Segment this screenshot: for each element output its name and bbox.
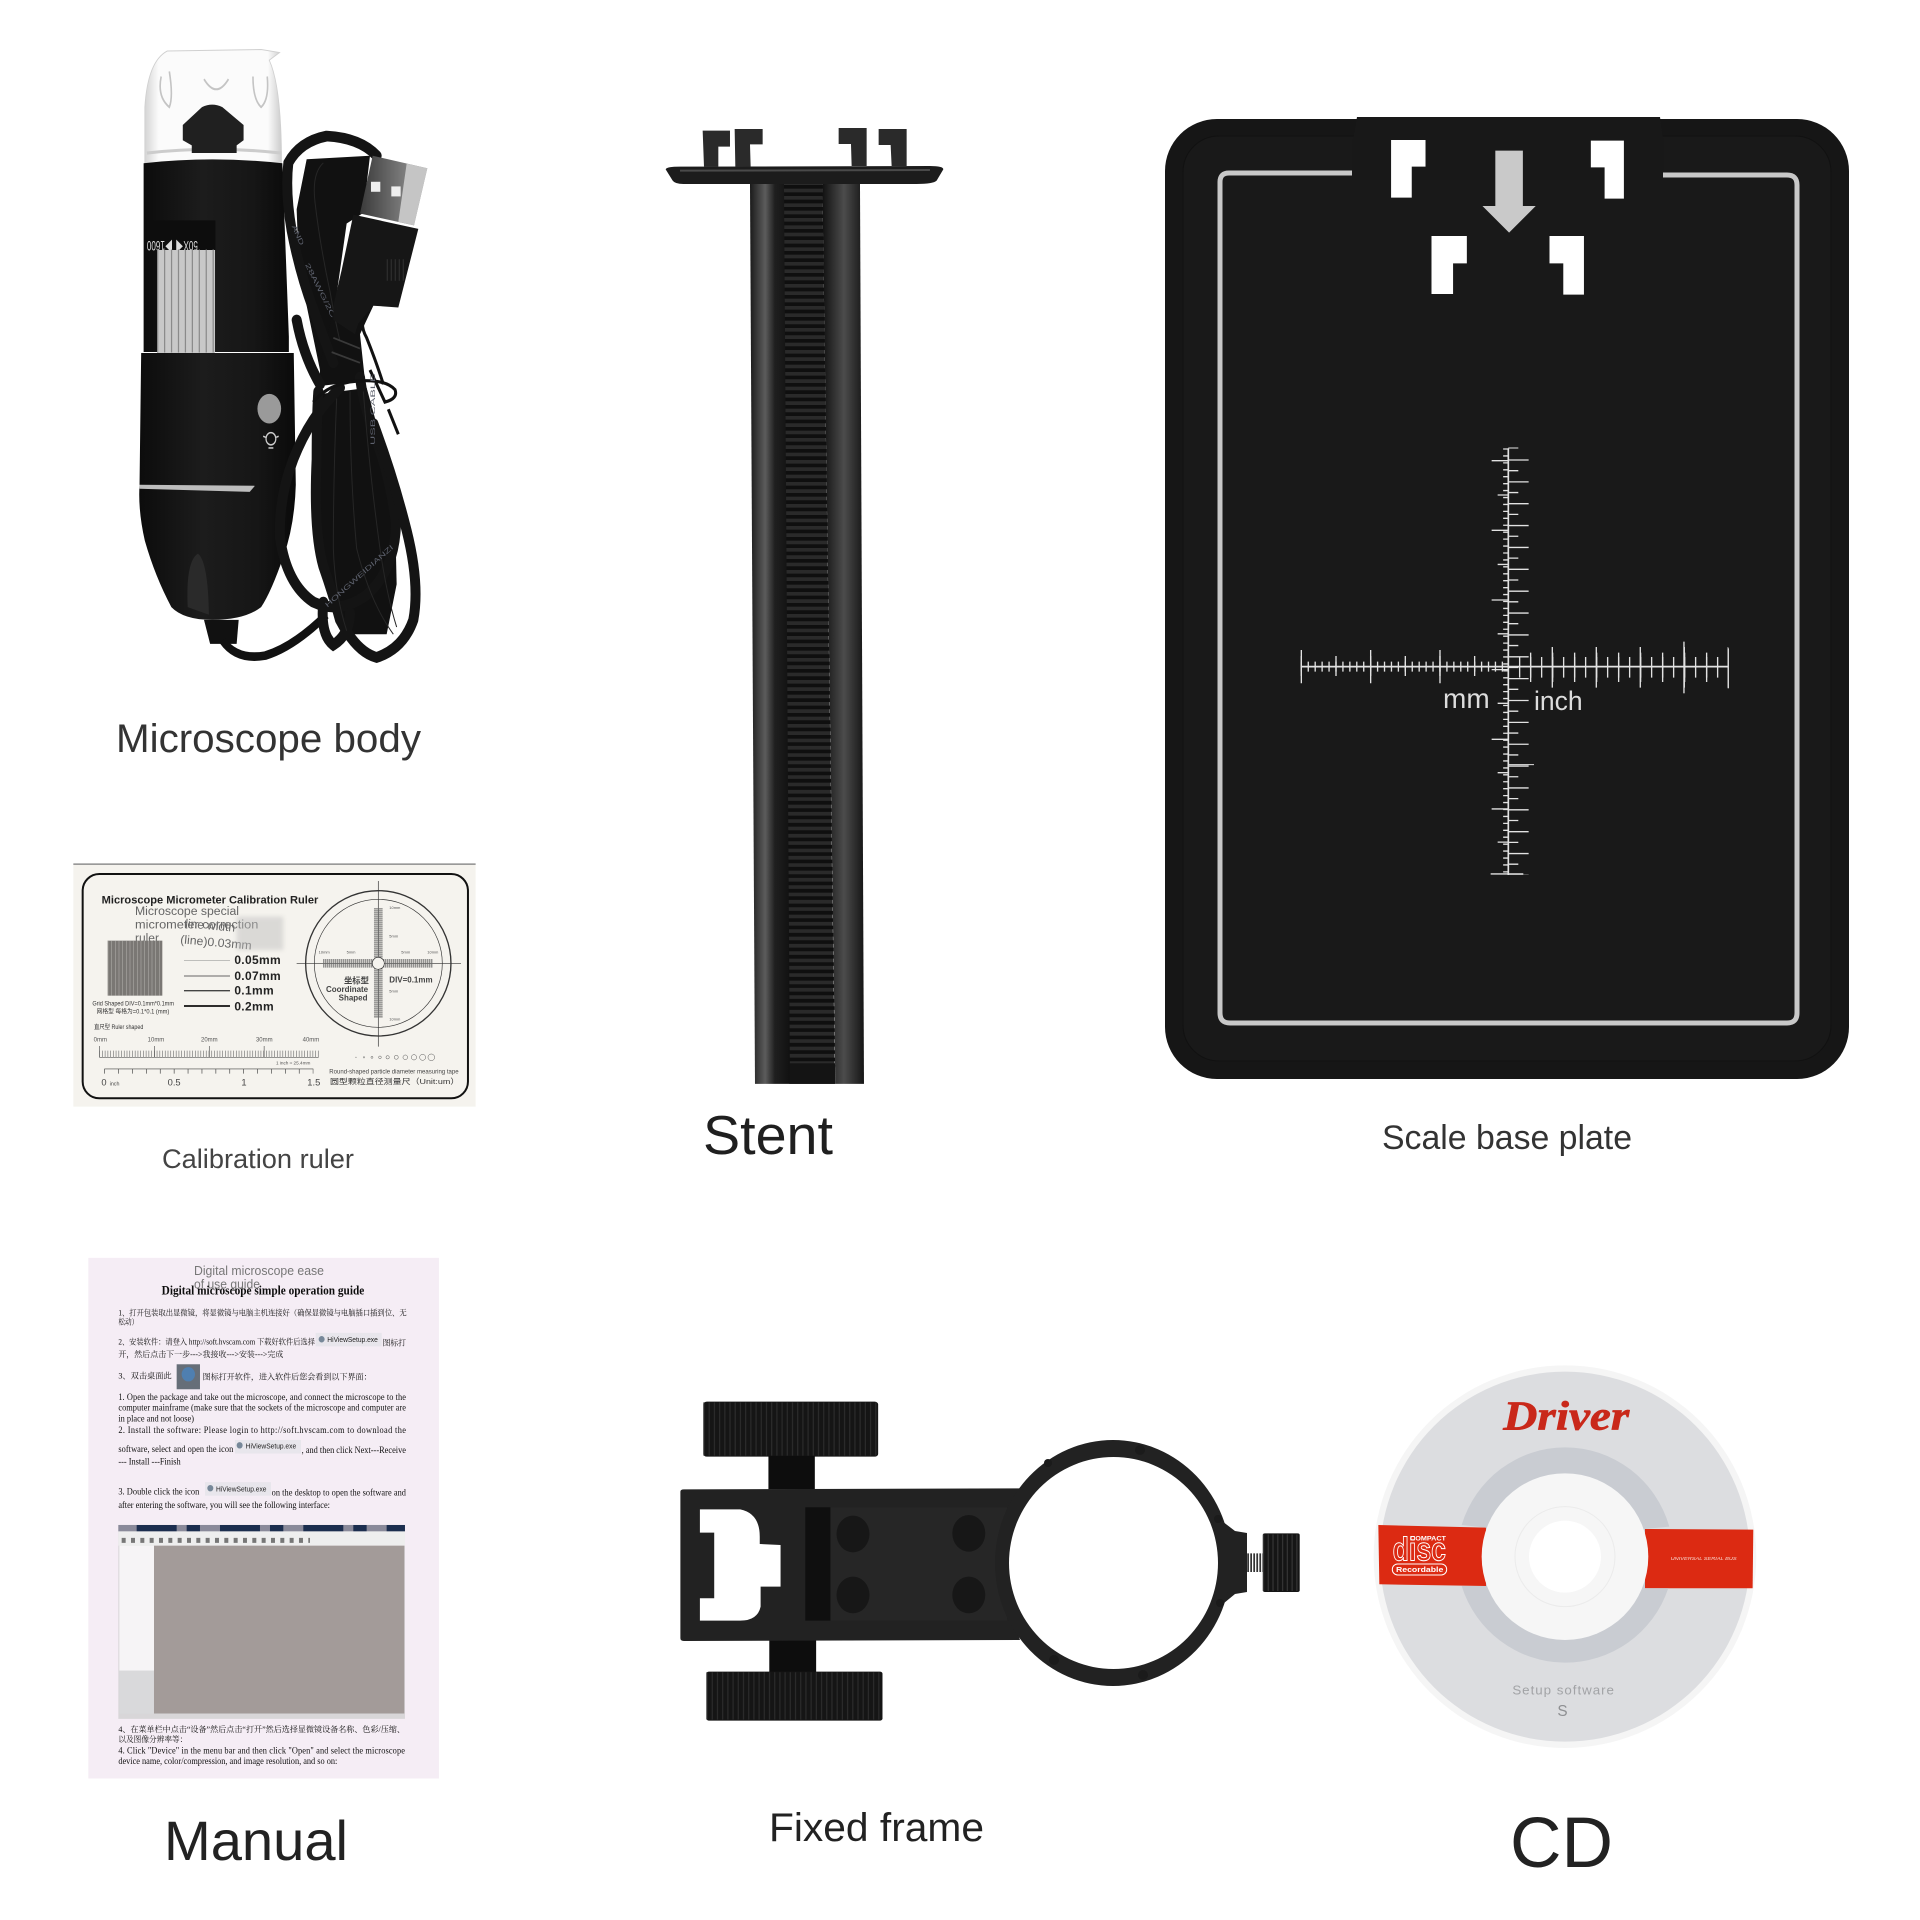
card background xyxy=(73,864,476,1107)
overlaid translation text: (line)0.03mm xyxy=(180,932,252,953)
panel: driver CD xyxy=(1374,1365,1756,1748)
reticle scale labels: 5mm xyxy=(347,949,356,954)
icon: panel dimples xyxy=(837,1515,985,1613)
reticle labels: Shaped xyxy=(339,993,368,1002)
grid caption: 网格型 每格为=0.1*0.1 (mm) xyxy=(97,1007,169,1015)
icon: silver focus wheel xyxy=(157,250,215,353)
manual Chinese instructions: 松动） xyxy=(118,1316,138,1326)
millimetre ruler: 10mm xyxy=(148,1038,164,1044)
manual English instructions: 1. Open the package and take out the microscope, and connect the microscope to the xyxy=(118,1392,406,1402)
grid square xyxy=(108,941,162,996)
line width samples: 0.2mm xyxy=(234,1000,274,1014)
particle diameter scale: Round-shaped particle diameter measuring tape xyxy=(329,1069,459,1076)
label: Scale base plate: Scale base plate xyxy=(1382,1119,1632,1157)
icon: tube right wall xyxy=(822,183,864,1084)
inch ruler: 0 xyxy=(101,1077,107,1087)
manual step four: device name, color/compression, and image resolution, and so on: xyxy=(118,1756,337,1766)
icon: bottom knob xyxy=(706,1672,882,1721)
manual Chinese instructions xyxy=(118,1307,407,1382)
inch ruler xyxy=(101,1061,320,1087)
card rounded border xyxy=(83,874,468,1098)
reticle labels xyxy=(326,975,433,1002)
ruler title: Microscope Micrometer Calibration Ruler xyxy=(102,894,319,906)
icon: setup file buttons xyxy=(205,1333,382,1496)
cable print text: USB CABLE xyxy=(370,373,377,445)
overlaid translation text: ruler xyxy=(135,931,159,945)
reticle scale labels: 10mm xyxy=(427,949,439,954)
icon: panel shadow xyxy=(805,1507,830,1621)
cable print text: AND xyxy=(290,224,304,247)
reticle scale labels: 5mm xyxy=(401,949,411,954)
icon: transparent dome cap xyxy=(145,49,282,163)
icon: solid lower cable bundle xyxy=(313,388,397,634)
panel: scale base plate xyxy=(1165,117,1849,1079)
reticle labels: 坐标型 xyxy=(344,975,369,985)
Driver title: Driver xyxy=(1502,1393,1630,1439)
icon: setup file buttons: HiViewSetup.exe xyxy=(216,1486,267,1493)
manual English instructions: in place and not loose) xyxy=(118,1413,194,1423)
cable print text xyxy=(290,224,395,609)
horizontal scale xyxy=(1301,642,1728,693)
icon: toothed rack xyxy=(783,183,835,1084)
manual Chinese instructions: 图标打 xyxy=(383,1337,406,1348)
millimetre ruler: 30mm xyxy=(256,1038,273,1044)
label: Calibration ruler: Calibration ruler xyxy=(162,1144,354,1174)
icon: ring dimples xyxy=(1044,1445,1224,1680)
icon: handle grip highlight xyxy=(187,554,209,615)
grid caption: 直尺型 Ruler shaped xyxy=(94,1023,143,1031)
cable print text: 28AWG/2C xyxy=(303,262,336,319)
manual Chinese instructions: 3、双击桌面此 xyxy=(118,1370,172,1381)
manual Chinese instructions: 图标打开软件，进入软件后您会看到以下界面： xyxy=(203,1371,372,1382)
plate body xyxy=(1165,119,1849,1079)
manual Chinese instructions: 1、打开包装取出显微镜，将显微镜与电脑主机连接好（确保显微镜与电脑插口插到位、无 xyxy=(118,1307,407,1318)
vertical scale xyxy=(1491,448,1534,875)
icon: bracket arm with window xyxy=(680,1488,1020,1641)
overlaid translation text: Microscope special xyxy=(135,904,239,918)
icon: cable strands xyxy=(280,136,416,657)
line width samples: 0.1mm xyxy=(234,984,274,998)
centre hole xyxy=(1529,1521,1601,1593)
icon: mounting ring xyxy=(995,1440,1231,1686)
overlaid heading: of use guide xyxy=(194,1277,260,1292)
overlaid heading xyxy=(194,1264,324,1292)
inch ruler: 1 inch ≈ 25.4mm xyxy=(276,1061,310,1066)
icon: rack foot xyxy=(789,1063,835,1084)
icon: top knob xyxy=(703,1402,878,1457)
icon: solid upper cable bundle xyxy=(297,156,370,370)
manual title: Digital microscope simple operation guide xyxy=(162,1283,365,1298)
overlaid translation text xyxy=(135,904,258,953)
manual English instructions: , and then click Next---Receive xyxy=(302,1445,406,1455)
millimetre ruler: 0mm xyxy=(94,1038,107,1044)
overlaid heading: Digital microscope ease xyxy=(194,1264,324,1278)
manual step four xyxy=(118,1724,405,1766)
reticle scale labels: 10mm xyxy=(389,905,401,910)
manual paper xyxy=(88,1258,439,1779)
icon: silver ring xyxy=(140,485,255,492)
reticle labels: Coordinate xyxy=(326,985,369,994)
manual English instructions: on the desktop to open the software and xyxy=(272,1487,407,1498)
bracket parts xyxy=(680,1402,1300,1721)
reticle scale labels xyxy=(319,905,439,1022)
manual English instructions: software, select and open the icon xyxy=(118,1444,234,1454)
panel: manual page xyxy=(88,1258,439,1779)
panel: fixed frame xyxy=(680,1402,1300,1721)
line width samples: 0.05mm xyxy=(234,953,281,967)
card top edge xyxy=(73,863,476,865)
manual English instructions: 3. Double click the icon xyxy=(118,1486,200,1497)
overlaid translation text: micrometer correction xyxy=(135,918,258,932)
icon: upper black barrel xyxy=(144,159,289,352)
manual Chinese instructions: 开，然后点击下一步--->我接收--->安装--->完成 xyxy=(118,1349,283,1360)
particle diameter scale xyxy=(329,1054,459,1086)
inch ruler: 0.5 xyxy=(168,1077,181,1087)
CD label xyxy=(1380,1372,1750,1742)
icon: bundle neck under plug xyxy=(320,306,373,386)
icon: screw and side knob xyxy=(1247,1533,1300,1592)
reticle labels: DIV=0.1mm xyxy=(389,975,433,984)
disc logo: Recordable xyxy=(1396,1565,1443,1574)
inner grey ring xyxy=(1462,1447,1669,1663)
icon: USB metal connector xyxy=(360,156,427,225)
icon: ring side block xyxy=(1218,1518,1247,1608)
manual English instructions: computer mainframe (make sure that the sockets of the microscope and computer are xyxy=(118,1402,406,1413)
panel: coiled USB cable and plug xyxy=(280,136,427,657)
inch ruler: inch xyxy=(110,1081,119,1087)
scale cross xyxy=(1301,448,1728,875)
manual English instructions: 2. Install the software: Please login to http://soft.hvscam.com to download the xyxy=(118,1425,406,1435)
label: Manual: Manual xyxy=(164,1809,348,1872)
icon: strand highlights xyxy=(314,163,397,634)
overlaid translation text: line width xyxy=(185,916,236,935)
setup software text: Setup software xyxy=(1512,1683,1614,1698)
silver frame xyxy=(1220,173,1797,1023)
line width samples xyxy=(184,953,281,1014)
disc logo: disc xyxy=(1393,1532,1446,1569)
icon: magnification label strip xyxy=(146,220,215,254)
white hub xyxy=(1482,1473,1648,1640)
grid caption: Grid Shaped DIV=0.1mm*0.1mm xyxy=(92,1001,174,1007)
manual step four: 4. Click "Device" in the menu bar and then click "Open" and select the microscope xyxy=(118,1745,405,1756)
label: Microscope body: Microscope body xyxy=(116,717,421,761)
reticle scale labels: 5mm xyxy=(389,933,399,938)
software screenshot xyxy=(118,1525,405,1719)
panel: microscope body xyxy=(139,49,326,657)
inch ruler: 1 xyxy=(241,1077,247,1087)
icon: down arrow xyxy=(1482,151,1536,233)
icon: lens nose xyxy=(183,105,244,153)
icon: recessed panel xyxy=(805,1507,1007,1621)
icon: tube left wall xyxy=(750,183,790,1084)
grid caption xyxy=(92,1001,174,1031)
icon: top neck xyxy=(768,1456,815,1489)
hub inner ring xyxy=(1515,1507,1615,1607)
icon: magnification label strip: 50X◀ ▶1600 xyxy=(147,238,198,254)
reticle scale labels: 5mm xyxy=(389,989,399,994)
panel: calibration ruler card xyxy=(73,863,476,1107)
coordinate reticle xyxy=(297,881,461,1047)
disc logo: COMPACT xyxy=(1410,1536,1446,1543)
icon: flange xyxy=(666,166,943,184)
manual Chinese instructions: 2、安装软件：请登入 http://soft.hvscam.com 下载好软件后选择 xyxy=(118,1336,315,1347)
manual step four: 4、在菜单栏中点击“设备”然后点击“打开”然后选择显微镜设备名称、色彩/压缩、 xyxy=(118,1724,405,1734)
red band right xyxy=(1645,1529,1753,1588)
line width samples: 0.07mm xyxy=(234,969,281,983)
plate tab xyxy=(1352,117,1664,180)
USB band text: UNIVERSAL SERIAL BUS xyxy=(1671,1556,1737,1562)
icon: four hooks xyxy=(703,128,907,167)
panel: stent column xyxy=(666,128,943,1084)
plate bevel xyxy=(1183,136,1831,1061)
manual English instructions: after entering the software, you will see the following interface: xyxy=(118,1500,330,1510)
S mark: S xyxy=(1557,1703,1568,1720)
scale text: inch: inch xyxy=(1534,686,1583,716)
icon: light bulb xyxy=(263,433,279,448)
label: Stent: Stent xyxy=(703,1104,833,1166)
icon: strain relief and short cable xyxy=(204,615,326,657)
manual step four: 以及图像分辨率等： xyxy=(118,1734,187,1744)
reticle scale labels: 10mm xyxy=(389,1017,401,1022)
icon: USB plug boot xyxy=(333,215,418,334)
icon: desktop shortcut xyxy=(177,1364,200,1389)
millimetre ruler: 40mm xyxy=(303,1038,319,1044)
slots and arrow xyxy=(1391,140,1624,295)
millimetre ruler: 20mm xyxy=(201,1038,218,1044)
manual English instructions: --- Install ---Finish xyxy=(118,1456,181,1466)
scale text: mm: mm xyxy=(1443,683,1490,714)
millimetre ruler xyxy=(94,1038,319,1057)
icon: lower handle xyxy=(139,353,296,620)
blurred smudge xyxy=(237,917,283,950)
label: CD: CD xyxy=(1510,1804,1613,1883)
label: Fixed frame: Fixed frame xyxy=(769,1806,984,1850)
inch ruler: 1.5 xyxy=(307,1077,320,1087)
red band left xyxy=(1378,1525,1486,1586)
icon: setup file buttons: HiViewSetup.exe xyxy=(327,1337,378,1344)
icon: bottom neck xyxy=(769,1640,816,1673)
cable print text: HONGWEIDIANZI xyxy=(324,544,395,609)
manual English instructions xyxy=(118,1392,407,1510)
reticle scale labels: 10mm xyxy=(319,949,330,954)
particle diameter scale: 圆型颗粒直径测量尺（Unit:um） xyxy=(330,1076,459,1086)
icon: light button xyxy=(257,394,281,423)
CD rim xyxy=(1374,1365,1756,1748)
icon: tie strap xyxy=(313,306,398,434)
slots xyxy=(1391,140,1624,295)
icon: setup file buttons: HiViewSetup.exe xyxy=(246,1443,296,1451)
